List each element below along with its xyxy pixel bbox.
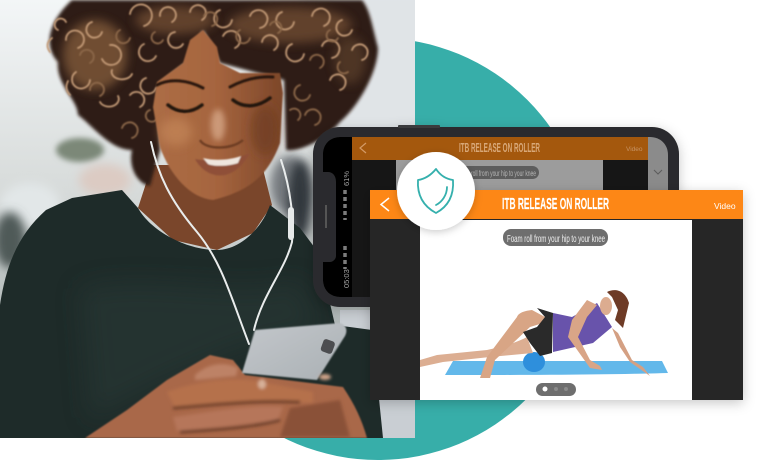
shirt	[0, 190, 383, 438]
earpiece	[325, 205, 327, 228]
orange header	[370, 190, 743, 219]
status icons	[343, 190, 347, 269]
dimmed title: ITB RELEASE ON ROLLER	[459, 141, 540, 155]
dimmed caption bubble: roll from your hip to your knee	[471, 168, 536, 178]
shield badge	[397, 152, 475, 230]
exercise card	[370, 190, 743, 400]
card title: ITB RELEASE ON ROLLER	[502, 196, 609, 213]
photo background	[0, 0, 425, 438]
screen dark area	[352, 160, 648, 297]
shorts	[523, 308, 553, 356]
dimmed right panel	[648, 137, 668, 200]
arm	[568, 300, 602, 370]
head	[600, 297, 612, 315]
hair	[607, 290, 629, 328]
earphone cable	[151, 142, 294, 344]
back arm	[612, 328, 650, 376]
dimmed video label: Video	[626, 146, 643, 153]
fingers	[167, 364, 350, 437]
status battery: 61%	[342, 171, 351, 186]
back phone	[313, 125, 679, 307]
hair	[47, 0, 378, 186]
status text: 05:03	[342, 269, 351, 288]
dimmed caption bubble	[455, 166, 539, 179]
smartphone in hand	[242, 323, 346, 380]
face	[153, 30, 283, 200]
teal background circle	[167, 38, 589, 460]
hand holding phone	[85, 355, 367, 438]
status bar and notch	[323, 137, 352, 297]
caption bubble	[503, 229, 608, 246]
white exercise image	[420, 220, 692, 400]
phone body	[313, 127, 679, 307]
tank top	[553, 303, 612, 352]
card body	[370, 190, 743, 400]
facial features	[157, 77, 279, 176]
exercise mat	[445, 361, 668, 375]
front leg	[480, 310, 545, 378]
dimmed header	[352, 137, 648, 160]
back chevron	[360, 143, 366, 153]
dimmed content	[396, 160, 603, 220]
phone camera	[320, 339, 335, 354]
caption bubble: Foam roll from your hip to your knee	[507, 233, 605, 245]
chevron	[654, 170, 662, 174]
white circle	[397, 152, 475, 230]
exercise illustration	[420, 290, 668, 378]
shirt highlight	[80, 280, 320, 420]
pagination dots	[536, 383, 576, 396]
neck	[138, 165, 272, 250]
video label: Video	[714, 201, 736, 211]
foam roller	[523, 352, 545, 372]
back leg	[420, 337, 533, 367]
back arrow	[381, 198, 389, 211]
photo: woman looking at her phone	[0, 0, 425, 438]
phone top button	[398, 125, 440, 128]
icon: shield	[418, 169, 453, 213]
